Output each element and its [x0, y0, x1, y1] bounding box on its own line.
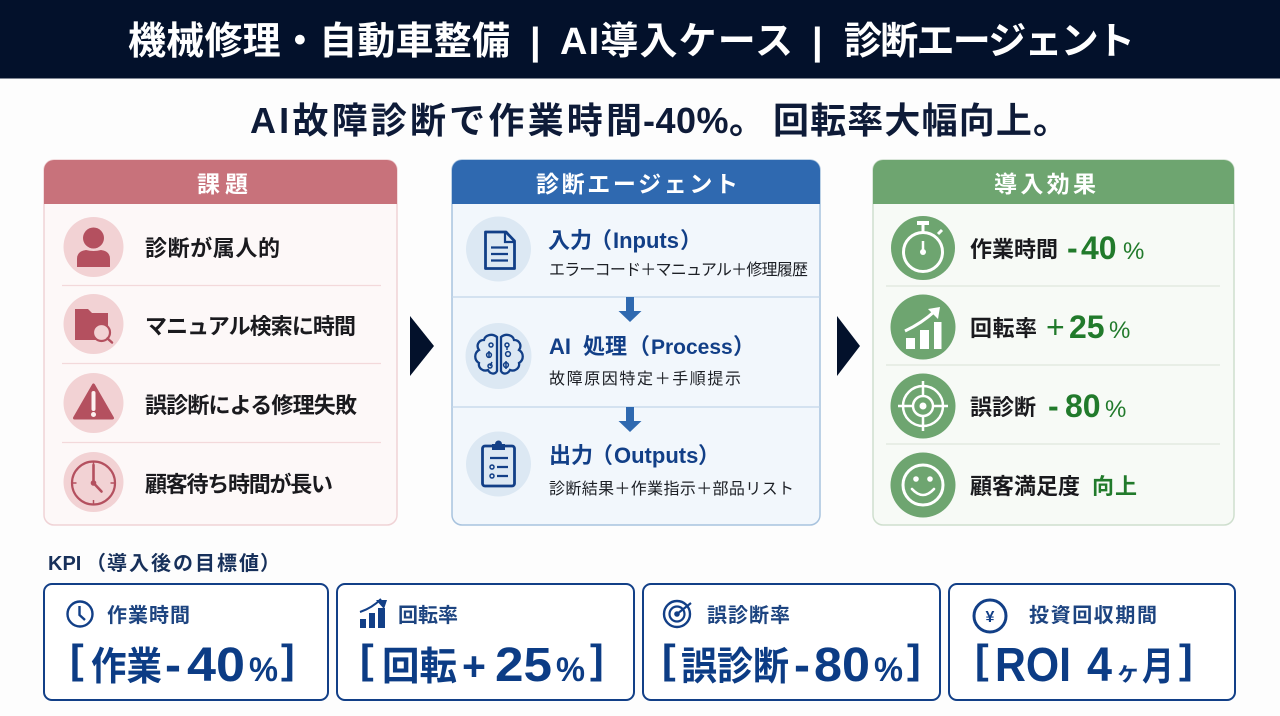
effect: 作業時間 -40%: 作業時間 — [970, 237, 1058, 262]
KPI card: 誤診断率: 誤診断 — [681, 646, 789, 689]
effect: 顧客満足度 向上: 向上 — [1092, 474, 1137, 499]
effect: 回転率 +25%: 回転率 — [970, 316, 1037, 341]
KPI card: 回転率: ] — [590, 636, 604, 682]
row: 診断が属人的 — [64, 217, 280, 277]
KPI heading: KPI — [48, 553, 81, 575]
effect: 誤診断 -80%: 誤診断 — [970, 395, 1036, 420]
step: 入力: （ — [590, 228, 612, 253]
step: AI処理: AI — [549, 334, 571, 359]
step: AI処理 — [466, 323, 755, 389]
effect: 回転率 +25%: + — [1046, 309, 1065, 345]
effect: 顧客満足度 向上: 顧客満足度 — [970, 474, 1080, 499]
step: 入力: ） — [680, 228, 702, 253]
KPI card: 投資回収期間: [ — [975, 636, 989, 682]
headline: -40%。 — [643, 100, 765, 141]
effect: 作業時間 -40% — [891, 216, 1144, 280]
row: 顧客待ち時間が長い: 顧客待ち時間が長い — [145, 472, 333, 497]
row: 顧客待ち時間が長い — [64, 452, 333, 512]
row: 誤診断による修理失敗: 誤診断による修理失敗 — [145, 393, 357, 418]
KPI card: 作業時間 — [44, 584, 328, 700]
icon: growth chart — [360, 599, 387, 628]
step: 入力: Inputs — [613, 228, 679, 253]
KPI heading: 導入後の目標値 — [107, 551, 259, 575]
step: 出力: （ — [591, 443, 613, 468]
panel header: 導入効果: 導入効果 — [994, 171, 1096, 197]
KPI card: 回転率 — [337, 584, 634, 700]
KPI card: 誤診断率: 80 — [814, 639, 870, 692]
step: AI処理: Process — [651, 336, 733, 359]
panel header: 課題: 課題 — [197, 171, 248, 197]
KPI card: 作業時間: % — [249, 651, 278, 689]
arrow: AI処理 to 出力 — [618, 407, 642, 432]
effect: 回転率 +25%: % — [1109, 317, 1130, 344]
step: AI処理: 処理 — [583, 334, 627, 359]
arrow: エージェント to 導入効果 — [837, 316, 860, 376]
KPI heading: ） — [260, 552, 280, 575]
arrow: 入力 to AI処理 — [618, 297, 642, 322]
effect: 誤診断 -80%: - — [1048, 388, 1059, 424]
KPI card: 投資回収期間: 月 — [1142, 646, 1174, 689]
KPI card: 回転率: [ — [360, 636, 374, 682]
effect: 誤診断 -80%: 80 — [1065, 388, 1101, 424]
headline: AI故障診断で作業時間 — [250, 100, 642, 141]
KPI card: 作業時間: 作業 — [91, 646, 162, 689]
effect: 回転率 +25% — [890, 294, 1130, 360]
KPI heading — [48, 551, 280, 575]
panel header: 診断エージェント: 診断エージェント — [536, 171, 738, 197]
panel: 診断エージェント — [452, 160, 820, 525]
step: 出力: 出力 — [549, 443, 593, 468]
headline: 回転率大幅向上。 — [773, 100, 1069, 141]
step: 出力: 診断結果＋作業指示＋部品リスト — [549, 480, 794, 498]
step: 出力: Outputs — [614, 443, 698, 468]
KPI card: 誤診断率: [ — [662, 636, 676, 682]
panel header: 課題 — [44, 160, 397, 204]
effect: 作業時間 -40%: 40 — [1081, 230, 1117, 266]
title bar: AI導入ケース — [560, 21, 793, 63]
icon: target with dart — [664, 601, 691, 627]
KPI card: 投資回収期間: ROI — [995, 639, 1071, 692]
step: 出力 — [466, 432, 794, 498]
row: マニュアル検索に時間: マニュアル検索に時間 — [145, 314, 356, 339]
row: マニュアル検索に時間 — [64, 294, 356, 354]
KPI card: 誤診断率: % — [874, 651, 903, 689]
title bar — [0, 0, 1280, 78]
effect: 作業時間 -40%: - — [1067, 230, 1078, 266]
panel: 導入効果 — [873, 160, 1234, 525]
KPI card: 作業時間: ] — [281, 636, 295, 682]
KPI card: 投資回収期間: 4 — [1087, 639, 1112, 692]
KPI card: 作業時間: 作業時間 — [107, 604, 190, 627]
step: AI処理: （ — [628, 334, 650, 359]
KPI heading: （ — [86, 552, 106, 575]
KPI card: 回転率: 25 — [495, 639, 552, 692]
KPI card: 誤診断率: - — [794, 639, 810, 692]
KPI card: 誤診断率 — [643, 584, 940, 700]
KPI card: 投資回収期間: ] — [1179, 636, 1193, 682]
KPI card: 作業時間: [ — [70, 636, 84, 682]
row: 診断が属人的: 診断が属人的 — [145, 236, 280, 261]
effect: 回転率 +25%: 25 — [1069, 309, 1105, 345]
step: 入力: エラーコード＋マニュアル＋修理履歴 — [549, 261, 808, 279]
KPI card: 作業時間: - — [165, 639, 181, 692]
effect: 誤診断 -80%: % — [1105, 396, 1126, 423]
step: 出力: ） — [698, 443, 720, 468]
effect: 顧客満足度 向上 — [890, 452, 1137, 518]
headline — [250, 100, 1069, 141]
title bar: | — [812, 21, 823, 63]
effect: 作業時間 -40%: % — [1123, 238, 1144, 265]
KPI card: 回転率: + — [462, 643, 486, 689]
icon: yen coin: ¥ — [986, 609, 995, 626]
KPI card: 作業時間: 40 — [187, 639, 245, 692]
KPI card: 回転率: 回転率 — [398, 604, 458, 627]
icon: yen coin — [974, 600, 1006, 632]
arrow: 課題 to エージェント — [410, 316, 434, 376]
KPI card: 投資回収期間: ヶ — [1116, 659, 1140, 686]
panel header: 導入効果 — [873, 160, 1234, 204]
step: 入力: 入力 — [548, 228, 592, 253]
title bar: 診断エージェント — [844, 21, 1135, 63]
KPI card: 回転率: 回転 — [382, 646, 457, 689]
icon: clock — [68, 602, 92, 626]
title bar: | — [530, 21, 541, 63]
panel: 課題 — [44, 160, 397, 525]
row: 誤診断による修理失敗 — [64, 373, 357, 433]
step: 入力 — [466, 216, 808, 282]
KPI card: 誤診断率: ] — [907, 636, 921, 682]
step: AI処理: 故障原因特定＋手順提示 — [549, 370, 741, 388]
KPI card: 誤診断率: 誤診断率 — [707, 604, 790, 627]
KPI card: 回転率: % — [556, 651, 585, 689]
KPI card: 投資回収期間 — [949, 584, 1235, 700]
effect: 誤診断 -80% — [890, 374, 1126, 438]
title bar: 機械修理・自動車整備 — [128, 21, 510, 63]
step: AI処理: ） — [733, 334, 755, 359]
KPI card: 投資回収期間: 投資回収期間 — [1029, 604, 1157, 627]
panel header: 診断エージェント — [452, 160, 820, 204]
